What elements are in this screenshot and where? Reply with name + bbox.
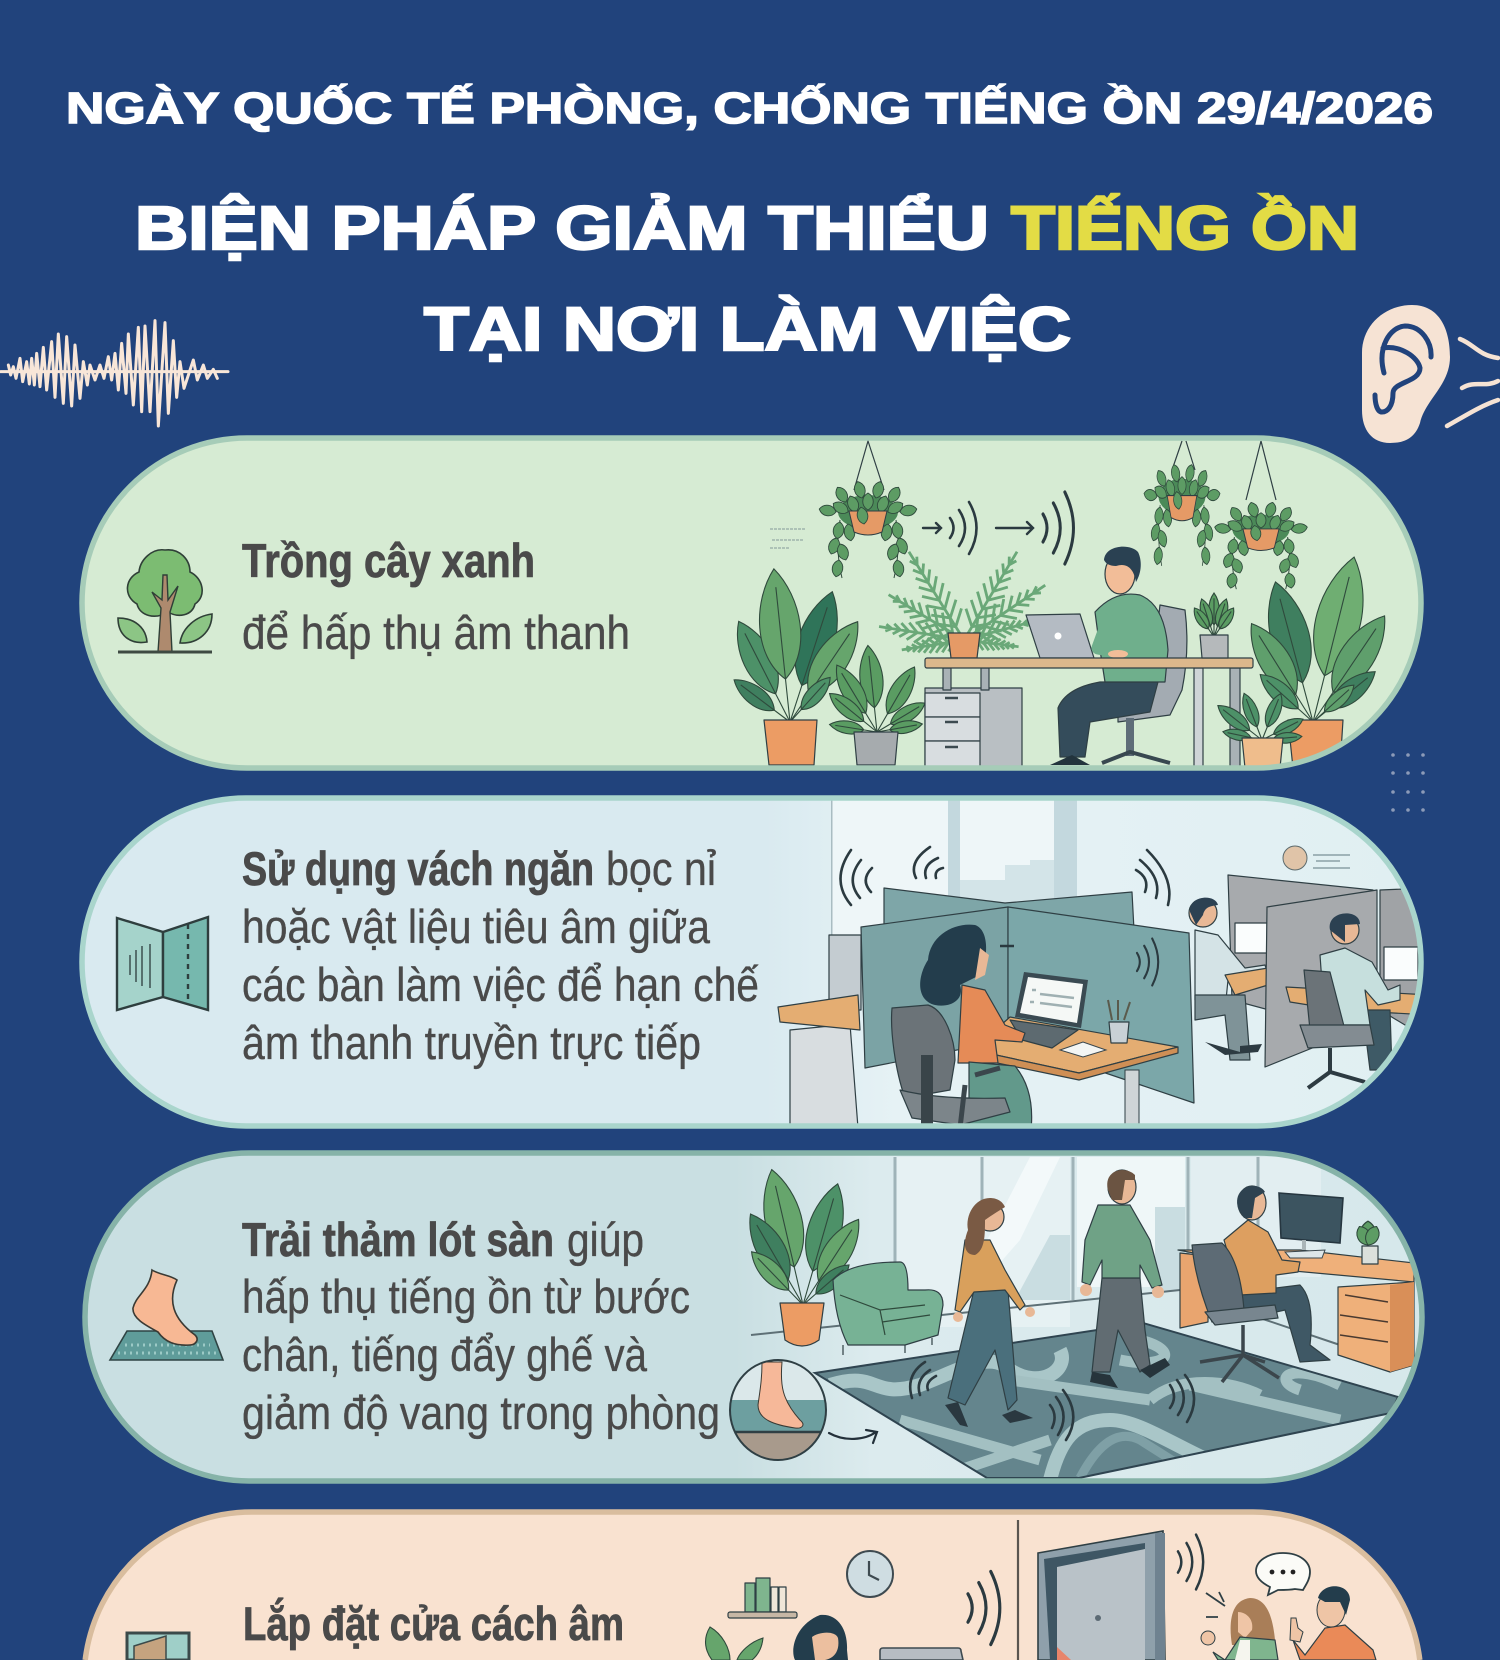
woman at laptop xyxy=(793,1615,848,1660)
description: để hấp thụ âm thanh xyxy=(242,606,630,659)
plant xyxy=(739,1165,870,1346)
woman walking xyxy=(945,1198,1035,1427)
desk xyxy=(925,658,1253,768)
sound waves and arrows xyxy=(923,522,1033,534)
panel: carpet xyxy=(85,1153,1425,1481)
bold heading: Trồng cây xanh xyxy=(242,534,535,587)
illustration: man working among plants xyxy=(725,441,1399,768)
windows xyxy=(852,801,1334,1123)
plant leaves xyxy=(706,1627,763,1660)
main desk xyxy=(996,1016,1179,1124)
laptop xyxy=(1026,614,1094,658)
speech bubble xyxy=(1256,1553,1310,1595)
talking man xyxy=(1290,1586,1376,1660)
torso xyxy=(1095,594,1168,682)
left large plant xyxy=(734,568,858,766)
third worker xyxy=(1300,913,1400,1088)
inset: foot on carpet xyxy=(730,1360,826,1463)
sound lines xyxy=(1447,339,1498,426)
small plant xyxy=(1354,1221,1382,1248)
icon: sound waveform xyxy=(1,321,228,426)
desk and seated man xyxy=(1178,1186,1414,1382)
legs xyxy=(1235,1285,1330,1362)
panel border xyxy=(85,1512,1420,1660)
sound waves on rug xyxy=(910,1362,1194,1440)
person at desk xyxy=(1026,547,1187,765)
arrow xyxy=(829,1430,877,1443)
divider wall line xyxy=(1017,1520,1019,1660)
hair xyxy=(920,925,986,1006)
line 1 rest: giúp xyxy=(567,1213,644,1266)
front teal partition xyxy=(861,907,1194,1103)
bold heading: Lắp đặt cửa cách âm xyxy=(243,1597,624,1650)
line 3: các bàn làm việc để hạn chế xyxy=(242,958,759,1011)
body xyxy=(958,985,1025,1063)
illustration: office cubicles xyxy=(765,798,1430,1130)
title line 1 white: BIỆN PHÁP GIẢM THIỂU xyxy=(135,194,989,262)
chair back xyxy=(892,1005,955,1098)
line 2: hấp thụ tiếng ồn từ bước xyxy=(242,1270,690,1323)
chair xyxy=(1118,605,1187,722)
hanging plants xyxy=(854,441,1276,500)
illustration: soundproof door and office xyxy=(706,1520,1376,1660)
icon: door xyxy=(127,1633,189,1660)
heading: event line: NGÀY QUỐC TẾ PHÒNG, CHỐNG TIẾNG ỒN 29/4/2026 xyxy=(66,82,1433,133)
man walking xyxy=(1080,1170,1170,1388)
second worker xyxy=(1189,898,1268,1060)
far grey cubicle xyxy=(1227,846,1374,1010)
monitor xyxy=(1279,1193,1343,1243)
line 1 rest: bọc nỉ xyxy=(606,842,716,895)
decorative dots xyxy=(1391,753,1425,812)
panel background xyxy=(82,798,1421,1126)
text xyxy=(242,1213,720,1439)
panel: plants xyxy=(82,438,1421,768)
panel: soundproof door xyxy=(85,1512,1420,1660)
woman at desk xyxy=(892,925,1032,1130)
legs xyxy=(1058,682,1158,757)
shelf with books xyxy=(728,1578,797,1618)
panel background xyxy=(85,1512,1420,1660)
chair xyxy=(1192,1243,1244,1322)
title line 2: TẠI NƠI LÀM VIỆC xyxy=(424,295,1071,363)
title line 1 highlight: TIẾNG ỒN xyxy=(1011,194,1359,262)
panel background xyxy=(85,1153,1422,1481)
line 3: chân, tiếng đẩy ghế và xyxy=(242,1328,648,1381)
text xyxy=(242,534,630,659)
tiny note xyxy=(770,529,806,548)
panel border xyxy=(82,438,1421,768)
rug xyxy=(815,1323,1398,1480)
back teal panels xyxy=(883,887,1134,924)
head xyxy=(1104,563,1136,595)
clock xyxy=(847,1551,893,1597)
icon: ear with sound xyxy=(1362,305,1498,443)
bold lead: Sử dụng vách ngăn xyxy=(242,842,594,895)
line 4: giảm độ vang trong phòng xyxy=(242,1386,720,1439)
talking woman xyxy=(1201,1592,1278,1660)
door xyxy=(1038,1531,1165,1660)
desk plant xyxy=(1194,592,1234,659)
panel: partitions xyxy=(82,798,1430,1130)
filing cabinet xyxy=(925,688,1022,768)
small front plant xyxy=(1217,692,1304,766)
laptop xyxy=(880,1648,963,1660)
line 2: hoặc vật liệu tiêu âm giữa xyxy=(242,900,711,953)
panel border xyxy=(82,798,1421,1126)
icon: folding partition xyxy=(117,917,208,1010)
shirt xyxy=(1224,1220,1300,1295)
laptop xyxy=(1010,972,1088,1048)
small grey-pot plant xyxy=(825,644,929,765)
room background xyxy=(735,1153,1425,1481)
inner waves xyxy=(1137,939,1158,985)
line 4: âm thanh truyền trực tiếp xyxy=(242,1016,701,1069)
sound waves xyxy=(968,1572,1000,1644)
panel border xyxy=(85,1153,1422,1481)
sound waves beyond door xyxy=(1178,1535,1203,1589)
sound waves above panels xyxy=(840,847,1169,905)
title xyxy=(135,194,1359,363)
icon: tree xyxy=(118,550,212,652)
front grey panel xyxy=(1265,888,1430,1067)
legs xyxy=(969,1062,1032,1130)
pen cup and paper xyxy=(1060,1000,1130,1057)
right large plant xyxy=(1250,556,1386,762)
ear xyxy=(1362,305,1450,443)
panel background xyxy=(82,438,1421,768)
icon: foot on mat xyxy=(110,1270,223,1360)
bold lead: Trải thảm lót sàn xyxy=(242,1213,554,1266)
ear inner lines xyxy=(1375,326,1431,412)
armchair xyxy=(833,1262,943,1355)
text xyxy=(242,842,759,1069)
left cabinet and side panel xyxy=(778,935,861,1128)
windows xyxy=(751,1157,1340,1345)
fern on desk xyxy=(878,551,1046,658)
illustration: people walking on carpet xyxy=(730,1153,1425,1481)
